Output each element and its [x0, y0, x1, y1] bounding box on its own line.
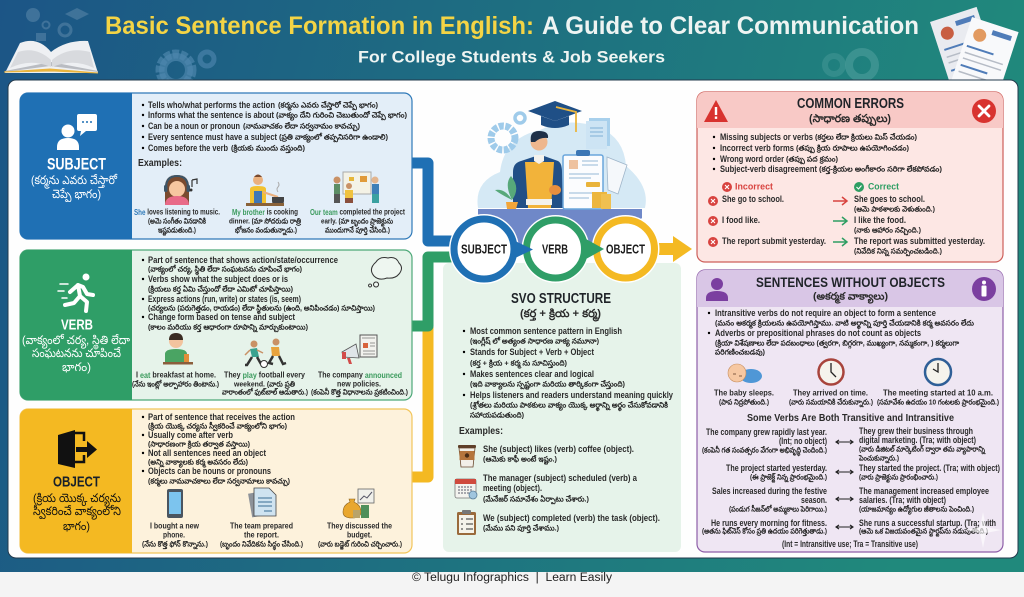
- svo bullets: (ఇంగ్లీష్ లో అత్యంత సాధారణ వాక్య నమూనా): [470, 336, 599, 348]
- subject example captions: early. (మా బృందం ప్రాజెక్టును: [321, 216, 393, 228]
- subject bullets: Informs what the sentence is about: [148, 110, 274, 120]
- verb example captions: The company announced: [318, 370, 402, 380]
- svo bullets: Helps listeners and readers understand meaning quickly: [470, 390, 673, 400]
- verb pairs right column: salaries. (Tra; with object): [859, 495, 946, 505]
- verb bullets: Verbs show what the subject does or is: [148, 274, 288, 284]
- errors bullets: Missing subjects or verbs: [720, 132, 813, 142]
- sentences bullets: పరిగణించబడవు): [715, 348, 765, 356]
- errors telugu subtitle: (సాధారణ తప్పులు): [809, 113, 891, 126]
- verb example captions: weekend. (వారు ప్రతి: [233, 380, 295, 390]
- icon: checklist clipboard: [457, 510, 476, 535]
- svo example 1: She (subject) likes (verb) coffee (object).: [483, 444, 634, 454]
- verb example captions: (కంపెనీ కొత్త విధానాలను ప్రకటించింది.): [311, 388, 408, 398]
- errors bullets: (కర్తలు లేదా క్రియలు మిస్ చేయడం): [815, 132, 917, 142]
- arrow: subject to verb: [513, 240, 533, 259]
- object example captions: I bought a new: [150, 522, 200, 530]
- icon: red clock: [818, 360, 844, 384]
- verb telugu label: సంఘటనను చూపించే: [32, 346, 121, 360]
- object bullets: Part of sentence that receives the action: [148, 412, 295, 422]
- errors bullets: Incorrect verb forms: [720, 143, 794, 153]
- icon: two football players: [245, 338, 286, 368]
- verb pairs right column: పెంచుకున్నారు.): [858, 454, 899, 464]
- verb telugu label: భాగం): [62, 360, 91, 374]
- connector: verb to circle: [412, 257, 452, 326]
- arrow: verb to object: [586, 239, 604, 259]
- object bullets: (క్రియ యొక్క చర్యను స్వీకరించే వాక్యంలోని భాగం): [148, 422, 287, 432]
- heading: object: OBJECT: [53, 474, 100, 490]
- subject example captions: My brother is cooking: [232, 208, 298, 216]
- panel: subject: [20, 93, 412, 239]
- verb pairs left column: The company grew rapidly last year.: [706, 427, 827, 437]
- circle: verb: [522, 215, 590, 283]
- arrow: object outward: [655, 236, 692, 262]
- object bullets: (సాధారణంగా క్రియ తర్వాత వస్తాయి): [148, 440, 250, 450]
- object example captions: [142, 522, 402, 550]
- object bullets: Usually come after verb: [148, 430, 234, 440]
- icon: man cooking: [246, 174, 284, 206]
- error row 3: The report submit yesterday.: [722, 236, 826, 246]
- verb example captions: new policies.: [337, 380, 381, 388]
- object bullets: Not all sentences need an object: [148, 448, 266, 458]
- subject bullets: Every sentence must have a subject: [148, 132, 277, 142]
- panel: object: [20, 409, 412, 553]
- sentence example captions: The meeting started at 10 a.m.: [883, 388, 993, 398]
- verb pairs left column: season.: [801, 495, 827, 505]
- object example captions: (నేను కొత్త ఫోన్ కొన్నాను.): [142, 540, 208, 550]
- svo example 1: (ఆమెకు కాఫీ అంటే ఇష్టం.): [483, 454, 557, 466]
- icon: running figure: [58, 274, 93, 311]
- illustration: graduate with resume: [477, 101, 646, 245]
- error row 1: (ఆమె పాఠశాలకు వెళుతుంది.): [854, 204, 935, 214]
- subject example captions: భోజనం వండుతున్నాడు.): [235, 226, 297, 236]
- heading: svo structure: SVO STRUCTURE: [511, 291, 611, 307]
- verb pairs left column: (Int; no object): [779, 436, 827, 446]
- heading: subject: SUBJECT: [47, 154, 106, 174]
- icon: background gear right: [825, 52, 875, 78]
- object telugu label: స్వీకరించే వాక్యంలోని: [33, 504, 121, 520]
- graduation cap: [528, 101, 582, 132]
- subject bullets: (కర్మను ఎవరు చేస్తారో చెప్పే భాగం): [278, 100, 378, 112]
- icon: blue clock: [925, 359, 951, 385]
- error row 1: She go to school.: [722, 194, 784, 204]
- panel: svo structure: [443, 263, 681, 552]
- errors bullets: [713, 132, 942, 174]
- error row 1: She goes to school.: [854, 194, 925, 204]
- subject bullets: Can be a noun or pronoun: [148, 121, 240, 131]
- connector: object to verb route: [412, 327, 428, 477]
- icon: sleeping baby: [728, 364, 762, 383]
- sentences bullets: (క్రియా విశేషణాలు లేదా పదబంధాలు (త్వరగా, బిగ్గరగా, ముఖ్యంగా, నమ్మకంగా, ) కర్మలుగా: [715, 338, 960, 350]
- sentences bullets: (మనం అకర్మక క్రియలను ఉపయోగిస్తాము. వాటి అర్థాన్ని పూర్తి చేయడానికి కర్మ అవసరం లేదు: [715, 318, 974, 330]
- svo examples heading: Examples:: [459, 425, 503, 437]
- double arrows: [836, 440, 853, 529]
- svo telugu subtitle: (కర్త + క్రియ + కర్మ): [520, 308, 601, 322]
- subject example captions: [134, 208, 405, 237]
- errors bullets: (తప్పు క్రియ రూపాలు ఉపయోగించడం): [796, 144, 909, 154]
- heading: common errors: COMMON ERRORS: [797, 96, 904, 112]
- icon: resumes: [930, 7, 1019, 95]
- verb example captions: I eat breakfast at home.: [136, 370, 216, 380]
- icon: calendar: [455, 479, 477, 499]
- icon: sparkle: [965, 512, 1001, 548]
- icon: warning triangle: [704, 100, 728, 122]
- man: [513, 131, 563, 208]
- icon: person: [706, 278, 728, 301]
- error row 3: (నివేదిక నిన్న సమర్పించబడింది.): [854, 246, 942, 256]
- verb example captions: [132, 370, 408, 398]
- verb example captions: (నేను ఇంట్లో అల్పాహారం తింటాను.): [132, 380, 219, 390]
- sentence example captions: The baby sleeps.: [714, 388, 774, 398]
- object example captions: (బృందం నివేదికను సిద్ధం చేసింది.): [220, 540, 303, 550]
- verb pairs left column: The project started yesterday.: [726, 463, 827, 473]
- icon: boy eating: [163, 333, 193, 364]
- icon: open book: [4, 8, 98, 73]
- sentence example captions: (సమావేశం ఉదయం 10 గంటలకు ప్రారంభమైంది.): [877, 398, 999, 408]
- verb example captions: They play football every: [224, 370, 306, 380]
- verb telugu label: (వాక్యంలో చర్య, స్థితి లేదా: [22, 333, 130, 350]
- icon: megaphone and news: [342, 335, 377, 364]
- white content panel: [8, 80, 1018, 558]
- heading: sentences without objects: SENTENCES WITHOUT OBJECTS: [756, 274, 945, 290]
- verb pairs left column: [702, 427, 827, 536]
- verb pairs left column: (అతను ఫిట్‌నెస్ కోసం ప్రతి ఉదయం పరిగెత్తుతాడు.): [702, 526, 827, 536]
- verb bullets: (చర్యలను (పరుగెత్తడం, రాయడం) లేదా స్థితులను (ఉంది, అనిపించడం) సూచిస్తాయి): [148, 304, 375, 314]
- svo example 2: The manager (subject) scheduled (verb) a: [483, 473, 637, 483]
- circle: verb: VERB: [542, 242, 568, 256]
- verb pairs right column: She runs a successful startup. (Tra; with: [859, 518, 996, 528]
- object example captions: They discussed the: [327, 522, 393, 530]
- verb pairs right column: [858, 426, 1000, 538]
- subject example captions: ముందుగానే పూర్తి చేసింది.): [325, 226, 390, 236]
- svo bullets: (శ్రోతలు మరియు పాఠకులు వాక్యం యొక్క అర్థాన్ని అర్థం చేసుకోవడానికి: [470, 400, 668, 412]
- object example captions: budget.: [347, 530, 372, 540]
- icon: thought cloud: [369, 258, 402, 287]
- heading: transitive and intransitive: Some Verbs Are Both Transitive and Intransitive: [747, 412, 954, 424]
- error row 2: I like the food.: [854, 215, 906, 225]
- svo bullets: Makes sentences clear and logical: [470, 369, 594, 379]
- svo bullets: సహాయపడుతుంది): [470, 410, 524, 420]
- panel: verb: [20, 250, 412, 400]
- verb pairs left column: Sales increased during the festive: [712, 486, 827, 496]
- svo bullets: (కర్త + క్రియ + కర్మ ను సూచిస్తుంది): [470, 358, 567, 370]
- subject examples heading: Examples:: [138, 157, 182, 169]
- verb pairs right column: (వారు ప్రాజెక్టును ప్రారంభించారు.): [859, 472, 938, 484]
- svo bullets: Most common sentence pattern in English: [470, 326, 622, 336]
- svo bullets: Stands for Subject + Verb + Object: [470, 347, 594, 357]
- verb pairs left column: (పండుగ సీజన్‌లో అమ్మకాలు పెరిగాయి.): [729, 504, 827, 516]
- verb bullets: (కాలం మరియు కర్త ఆధారంగా రూపాన్ని మార్చుకుంటాయి): [148, 322, 308, 332]
- subject bullets: (వాక్యం దేని గురించి చెబుతుందో చెప్పే భాగం): [276, 110, 407, 122]
- subtitle: For College Students & Job Seekers: [358, 48, 665, 66]
- verb pairs right column: (వారు డిజిటల్ మార్కెటింగ్ ద్వారా తమ వ్యాపారాన్ని: [859, 444, 986, 456]
- circle: subject: SUBJECT: [461, 242, 507, 256]
- verb pairs right column: The management increased employee: [859, 486, 989, 496]
- verb bullets: Change form based on tense and subject: [148, 312, 295, 322]
- verb pairs right column: (యాజమాన్యం ఉద్యోగుల జీతాలను పెంచింది.): [859, 504, 974, 516]
- subject example captions: ఇష్టపడుతుంది.): [158, 226, 196, 237]
- verb pairs left column: He runs every morning for fitness.: [711, 518, 827, 528]
- subject example captions: She loves listening to music.: [134, 208, 220, 216]
- sentences bullets: Adverbs or prepositional phrases do not count as objects: [715, 328, 921, 338]
- sentences bullets: [708, 308, 974, 356]
- verb pairs right column: (ఆమె ఒక విజయవంతమైన స్టార్టప్‌ను నడుపుతోంది.): [859, 526, 988, 538]
- errors bullets: (కర్త-క్రియల అంగీకారం సరిగా లేకపోవడం): [819, 164, 942, 174]
- object example captions: (వారు బడ్జెట్ గురించి చర్చించారు.): [318, 540, 402, 550]
- footer credit: © Telugu Infographics | Learn Easily: [412, 572, 612, 584]
- object bullets: [142, 412, 295, 488]
- verb bullets: (వాక్యంలో చర్య, స్థితి లేదా సంఘటనను చూపించే భాగం): [148, 264, 302, 276]
- icon: team at a board: [334, 172, 379, 203]
- svo example 3: (మేము పని పూర్తి చేశాము.): [483, 524, 559, 534]
- papers and documents: [586, 118, 627, 209]
- title: A Guide to Clear Communication: [542, 12, 919, 40]
- verb bullets: Express actions (run, write) or states (is, seem): [148, 294, 301, 304]
- subject bullets: Tells who/what performs the action: [148, 100, 275, 110]
- object telugu label: (క్రియ యొక్క చర్యను: [33, 491, 121, 507]
- sentence example captions: [714, 388, 999, 408]
- object telugu label: భాగం): [63, 519, 90, 533]
- title: [105, 12, 919, 40]
- subject bullets: (నామవాచకం లేదా సర్వనామం కావచ్చు): [243, 122, 360, 132]
- subject example captions: (అమె సంగీతం వినడానికి: [148, 216, 206, 226]
- verb bullets: [142, 255, 375, 332]
- subject example captions: dinner. (మా సోదరుడు రాత్రి: [229, 216, 302, 226]
- svo example 3: We (subject) completed (verb) the task (object).: [483, 513, 660, 523]
- icon: woman with headphones: [164, 175, 197, 205]
- error row 2: (నాకు ఆహారం నచ్చింది.): [854, 226, 921, 236]
- verb bullets: Part of sentence that shows action/state/occurrence: [148, 255, 338, 265]
- desk: [478, 209, 642, 245]
- panel: sentences without objects: [697, 270, 1003, 552]
- verb pairs right column: digital marketing. (Tra; with object): [859, 435, 976, 445]
- svo flow circles: [449, 214, 692, 284]
- verb example captions: వారాంతంలో ఫుట్‌బాల్ ఆడుతారు.): [222, 388, 308, 396]
- object example captions: the report.: [244, 530, 279, 540]
- gear icons: [491, 113, 525, 150]
- error row 1: [708, 194, 935, 214]
- object telugu label: [33, 491, 121, 533]
- error row 2: [708, 215, 921, 236]
- verb bullets: (క్రియలు కర్త ఏమి చేస్తుందో లేదా ఎమిటో చూపిస్తాయి): [148, 284, 293, 294]
- icon: coffee cup: [458, 445, 476, 467]
- object bullets: (అన్ని వాక్యాలకు కర్మ అవసరం లేదు): [148, 458, 248, 468]
- icon: background gear left: [160, 52, 214, 86]
- correct heading: Correct: [868, 182, 900, 192]
- circle: object: [592, 215, 660, 283]
- icon: exit door: [58, 430, 97, 468]
- incorrect heading: Incorrect: [735, 182, 774, 192]
- subject telugu label: చెప్పే భాగం): [52, 187, 101, 203]
- error row 2: I food like.: [722, 215, 760, 225]
- sentence example captions: (పాప నిద్రపోతుంది.): [719, 398, 769, 408]
- errors bullets: Subject-verb disagreement: [720, 164, 817, 174]
- icon: report pages: [248, 488, 276, 517]
- svo example 2: [483, 473, 637, 504]
- sentence example captions: (వారు సమయానికి చేరుకున్నారు.): [789, 398, 873, 408]
- sentence example captions: They arrived on time.: [793, 388, 868, 398]
- circle: object: OBJECT: [606, 242, 645, 256]
- connector: subject to circle: [412, 163, 452, 241]
- errors bullets: (తప్పు పద క్రమం): [786, 154, 838, 164]
- correct heading: [854, 182, 900, 192]
- title: Basic Sentence Formation in English:: [105, 12, 534, 40]
- svo example 3: [483, 513, 660, 534]
- svo example 2: (మేనేజర్ సమావేశం ఏర్పాటు చేశారు.): [483, 494, 589, 504]
- icon: person with speech bubble: [57, 114, 97, 150]
- clipboard resume: [563, 150, 603, 209]
- subject bullets: Comes before the verb: [148, 143, 229, 153]
- error row 3: [708, 236, 985, 256]
- icon: error x: [972, 99, 996, 123]
- subject telugu label: (కర్మను ఎవరు చేస్తారో: [31, 173, 118, 189]
- svo bullets: (ఇది వాక్యాలను స్పష్టంగా మరియు తార్కికంగా చేస్తుంది): [470, 380, 625, 391]
- subject bullets: (క్రియకు ముందు వస్తుంది): [231, 144, 305, 154]
- plant: [495, 176, 518, 209]
- heading: verb: VERB: [61, 316, 93, 334]
- subject example captions: Our team completed the project: [310, 208, 405, 216]
- object example captions: The team prepared: [230, 522, 293, 530]
- subject bullets: (ప్రతి వాక్యంలో తప్పనిసరిగా ఉండాలి): [279, 132, 388, 144]
- verb pairs right column: They grew their business through: [859, 426, 973, 436]
- error row 3: The report was submitted yesterday.: [854, 236, 985, 246]
- verb pairs left column: (కంపెనీ గత సంవత్సరం వేగంగా అభివృద్ధి చెందింది.): [702, 446, 827, 456]
- verb pairs left column: (ఈ ప్రాజెక్ట్ నిన్న ప్రారంభమైంది.): [750, 472, 827, 484]
- sentences bullets: Intransitive verbs do not require an object to form a sentence: [715, 308, 936, 318]
- subject telugu label: [31, 173, 118, 203]
- object example captions: phone.: [163, 530, 185, 540]
- errors bullets: Wrong word order: [720, 154, 784, 164]
- icon: person badge: [972, 277, 996, 301]
- sentences telugu subtitle: (అకర్మక వాక్యాలు): [813, 292, 888, 304]
- object bullets: Objects can be nouns or pronouns: [148, 466, 271, 476]
- verb telugu label: [22, 333, 130, 374]
- object bullets: (కర్మలు నామవాచకాలు లేదా సర్వనామాలు కావచ్చు): [148, 476, 290, 488]
- abbreviation note: (Int = Intransitive use; Tra = Transitive use): [782, 539, 918, 549]
- icon: money bag and chart: [343, 489, 374, 518]
- icon: phone: [167, 489, 183, 518]
- svo example 2: meeting (object).: [483, 483, 542, 493]
- panel: common errors: [697, 92, 1003, 262]
- subject bullets: [142, 100, 407, 154]
- svo example 1: [483, 444, 634, 466]
- circle: subject: [449, 214, 519, 284]
- svo bullets: [463, 326, 673, 420]
